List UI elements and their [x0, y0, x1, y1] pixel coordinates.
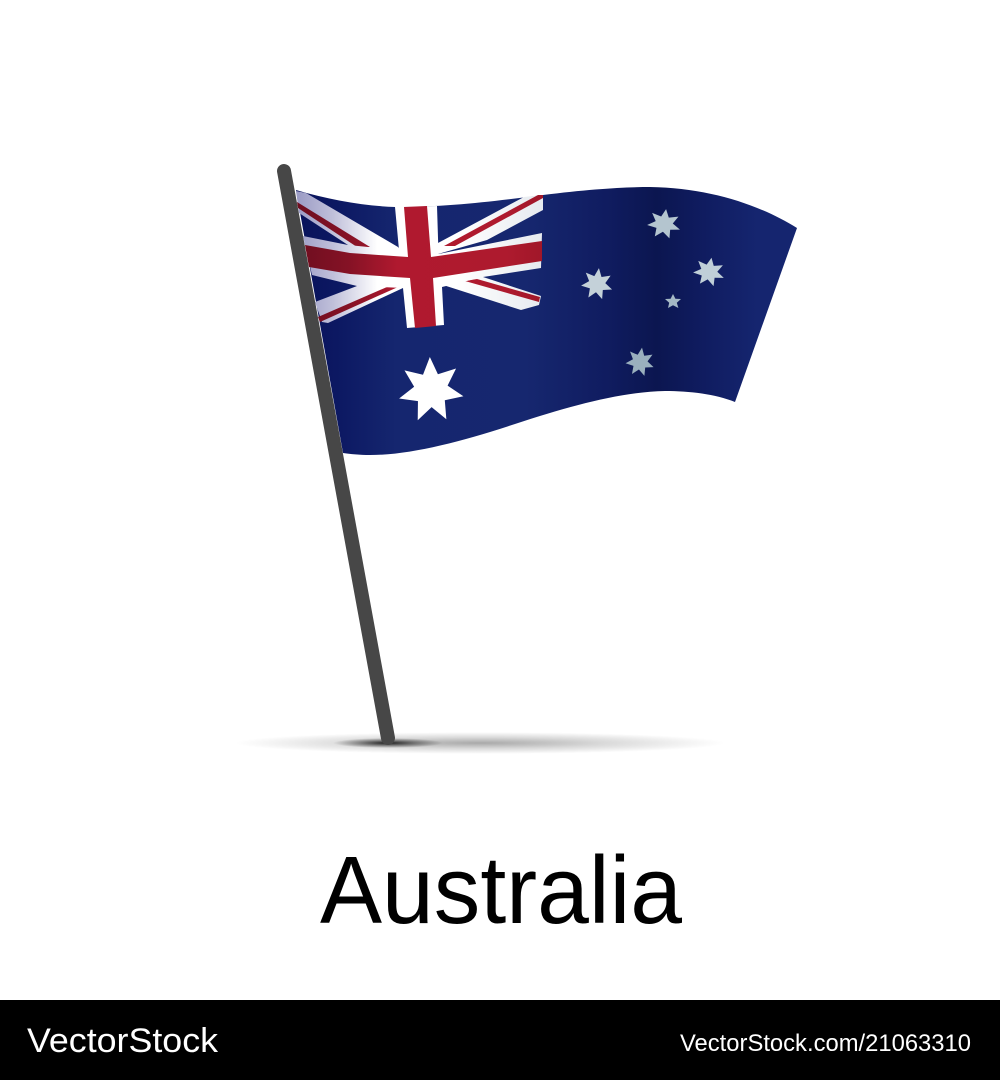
- watermark footer bar: [0, 1000, 1000, 1080]
- waving Australian flag: [296, 187, 797, 455]
- Southern Cross stars: [580, 207, 727, 377]
- Commonwealth star: [398, 356, 464, 421]
- white cross: [303, 206, 542, 328]
- red cross: [305, 206, 542, 328]
- title: Australia: [320, 837, 683, 944]
- diagonal red stripes: [297, 195, 543, 322]
- watermark brand: VectorStock: [27, 1022, 219, 1060]
- Union Jack canton: [296, 191, 543, 328]
- diagonal white bands: [296, 191, 543, 323]
- flag blue field: [296, 187, 797, 455]
- pole shadow on ground: [235, 732, 725, 754]
- watermark image id: VectorStock.com/21063310: [680, 1030, 971, 1057]
- flag pole: [284, 171, 388, 738]
